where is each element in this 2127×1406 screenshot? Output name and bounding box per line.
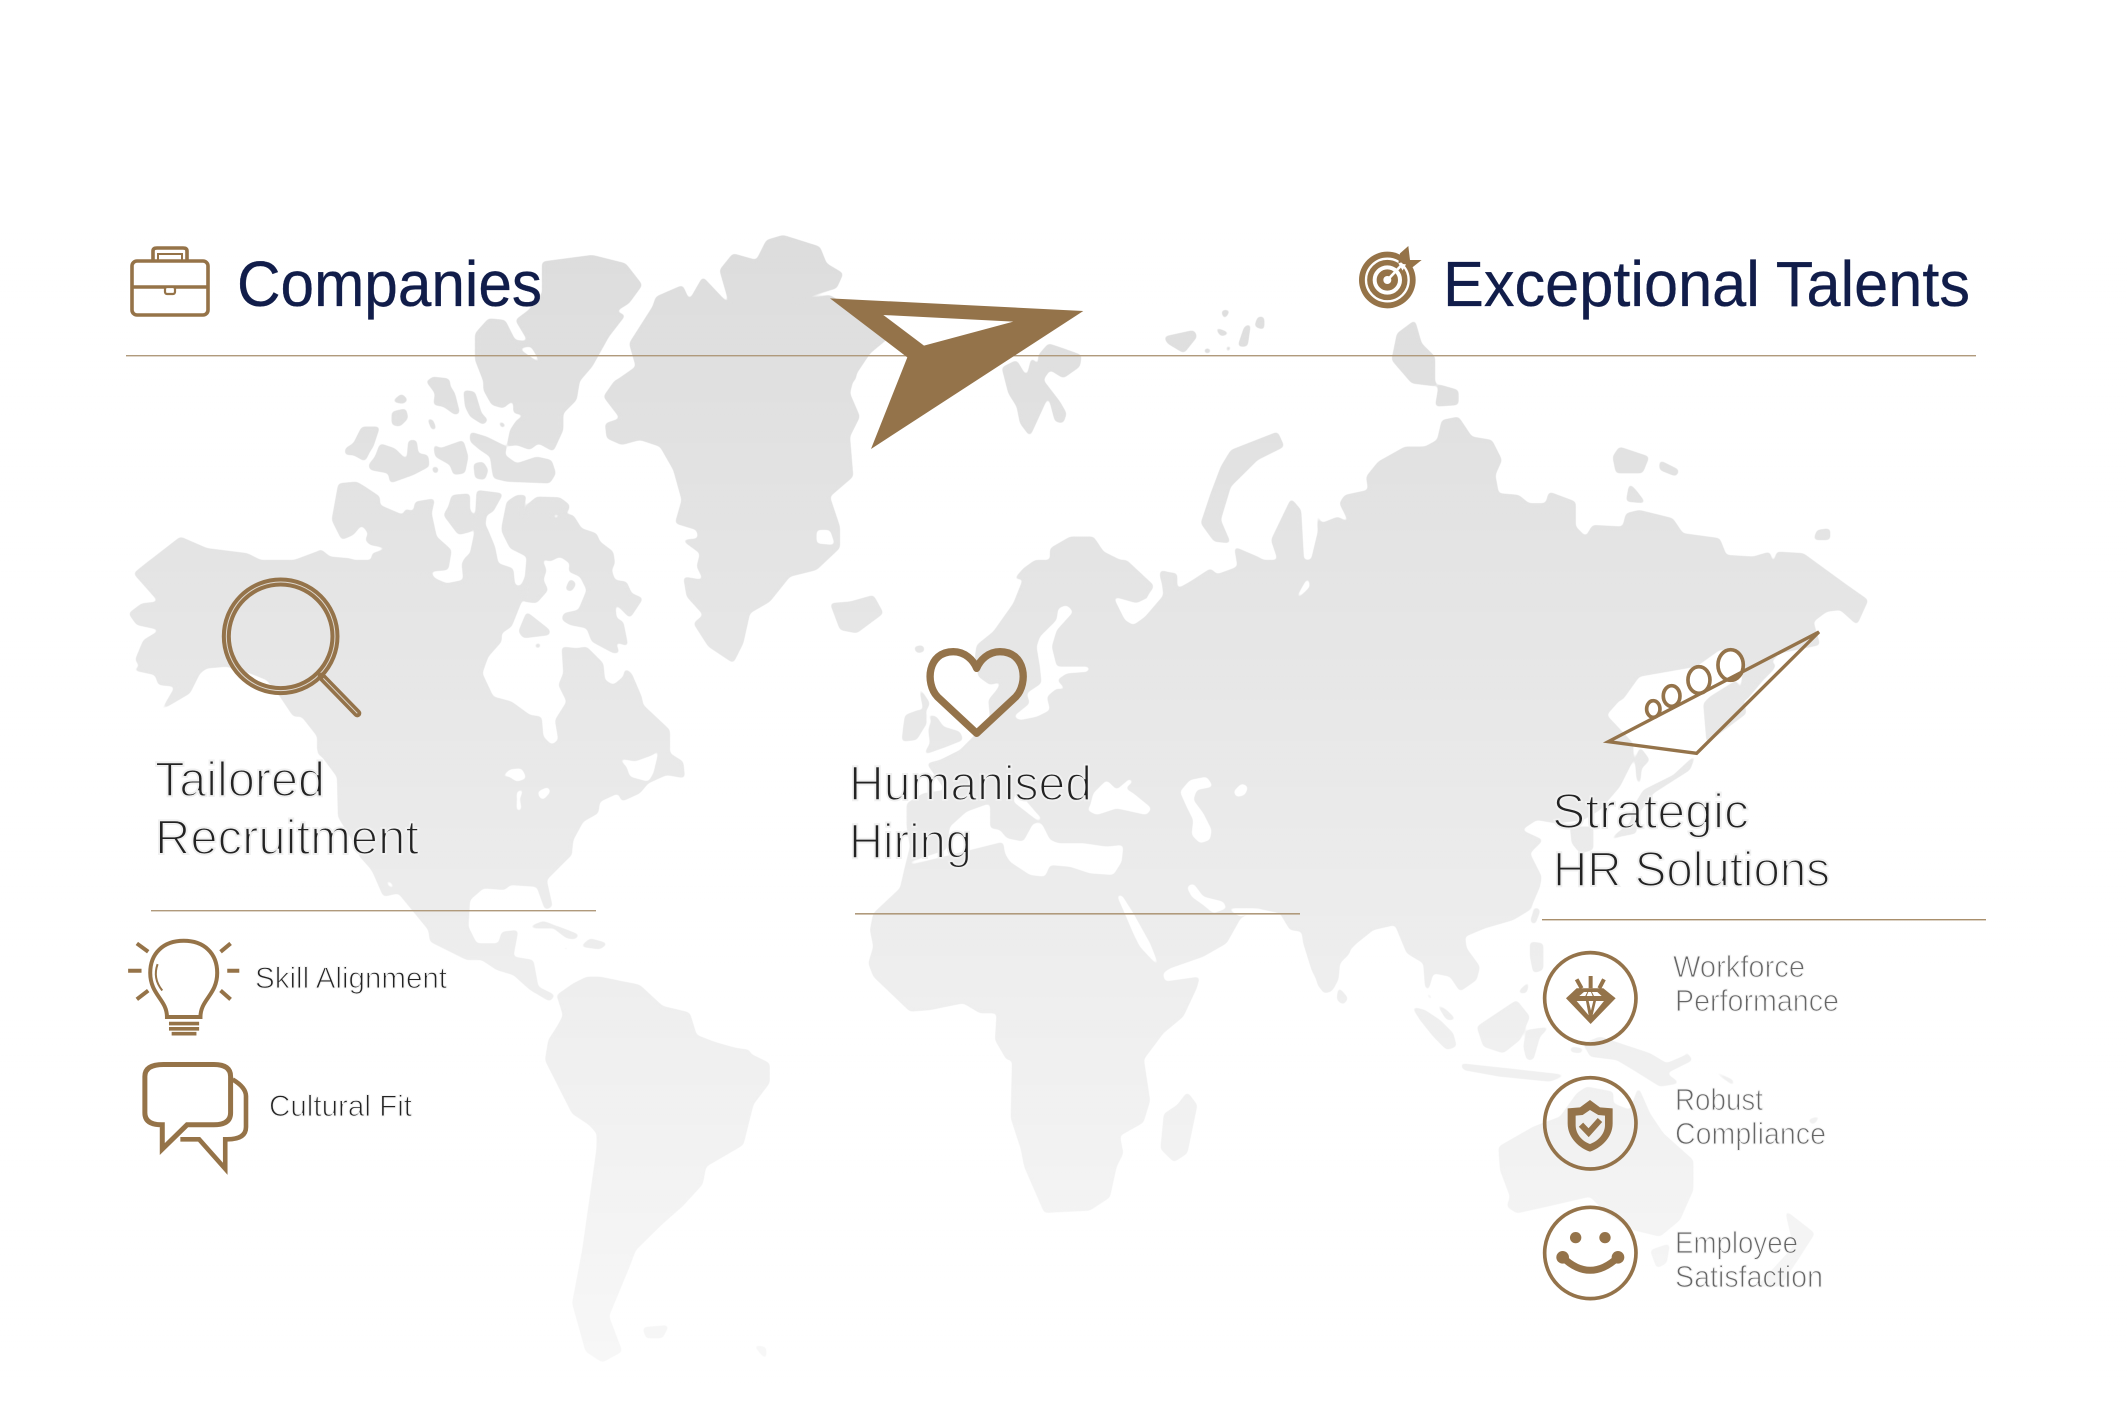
icon: target <box>1359 246 1422 308</box>
icon: diamond badge <box>1545 953 1636 1044</box>
icon: magnifying glass <box>226 582 357 713</box>
heading: Tailored Recruitment: Tailored <box>155 753 325 807</box>
icon: outlined paper plane with people <box>1608 632 1819 753</box>
icon: paper plane logo <box>830 298 1083 449</box>
icon: smiley badge <box>1545 1207 1636 1299</box>
label: Robust Compliance <box>1675 1082 1826 1151</box>
label: Employee Satisfaction: Employee <box>1675 1225 1798 1260</box>
label: Employee Satisfaction <box>1675 1225 1823 1294</box>
icon: heart <box>930 652 1023 733</box>
heading: Strategic HR Solutions: HR Solutions <box>1553 843 1830 897</box>
icon: shield badge <box>1545 1078 1636 1169</box>
label: Workforce Performance <box>1673 949 1839 1018</box>
heading: Humanised Hiring <box>849 757 1092 869</box>
label: Workforce Performance: Workforce <box>1673 949 1805 984</box>
label: Workforce Performance: Performance <box>1675 983 1839 1018</box>
label: Cultural Fit: Cultural Fit <box>269 1090 413 1123</box>
heading: Tailored Recruitment: Recruitment <box>155 811 419 865</box>
icon: speech bubbles <box>145 1064 246 1169</box>
divider under headers <box>126 355 1976 356</box>
panel: Humanised Hiring <box>849 652 1300 915</box>
heading: Strategic HR Solutions <box>1552 785 1830 897</box>
heading: Humanised Hiring: Humanised <box>849 757 1092 811</box>
icon: briefcase <box>132 248 208 315</box>
panel: Strategic HR Solutions <box>1542 632 1986 1299</box>
heading: Exceptional Talents: Exceptional Talents <box>1443 248 1970 320</box>
label: Robust Compliance: Compliance <box>1675 1116 1826 1151</box>
heading: Tailored Recruitment <box>155 753 419 865</box>
icon: light bulb <box>128 941 239 1034</box>
label: Robust Compliance: Robust <box>1675 1082 1763 1117</box>
panel: Tailored Recruitment <box>128 582 596 1169</box>
label: Employee Satisfaction: Satisfaction <box>1675 1259 1823 1294</box>
heading: Companies: Companies <box>237 248 542 320</box>
label: Skill Alignment: Skill Alignment <box>255 962 448 995</box>
heading: Strategic HR Solutions: Strategic <box>1552 785 1749 839</box>
heading: Humanised Hiring: Hiring <box>849 815 972 869</box>
